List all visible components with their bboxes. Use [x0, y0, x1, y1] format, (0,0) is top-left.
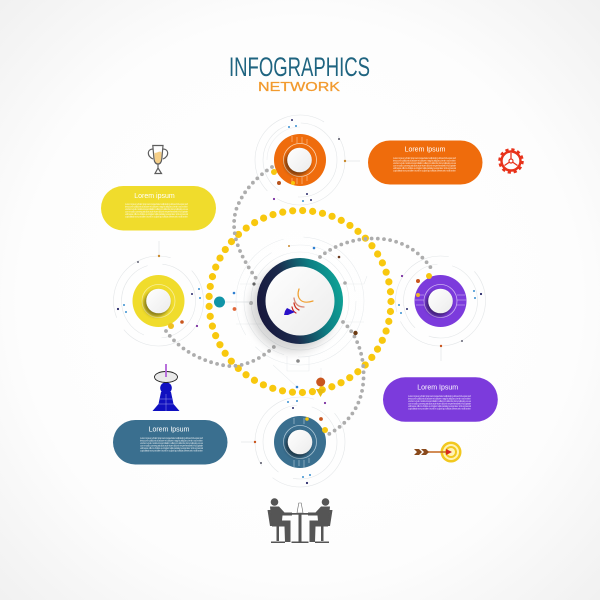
grey dotted path: center to right node — [320, 238, 433, 271]
subtitle: NETWORK — [258, 80, 341, 94]
node: left yellow — [132, 275, 184, 327]
orange connector dot and marker — [316, 378, 325, 397]
panel: yellow pill — [101, 186, 216, 230]
node: bottom blue — [274, 416, 326, 468]
body text — [140, 436, 204, 452]
body text: Lorem ipsum dolor sit amet consectetur adipiscing elit sed do eiusmod — [140, 436, 203, 440]
body text: tempor incididunt ut labore et dolore magna aliqua ut enim ad minim — [408, 396, 472, 400]
body text: veniam quis nostrud exercitation ullamco laboris nisi ut aliquip ex ea — [125, 207, 188, 211]
body text: tempor incididunt ut labore et dolore magna aliqua ut enim ad minim — [140, 438, 204, 442]
node: top orange — [274, 134, 326, 186]
body text: veniam quis nostrud exercitation ullamco laboris nisi ut aliquip ex ea — [393, 161, 456, 165]
body text: cupidatat non proident sunt in culpa qui officia deserunt mollit anim — [125, 214, 189, 218]
body text: velit esse cillum dolore eu fugiat nulla pariatur excepteur sint occaecat — [408, 404, 471, 408]
body text: cupidatat non proident sunt in culpa qui officia deserunt mollit anim — [393, 168, 457, 172]
body text: Lorem ipsum dolor sit amet consectetur adipiscing elit sed do eiusmod — [408, 394, 472, 398]
icon: satellite signal — [284, 289, 313, 315]
icon: trophy glass — [148, 146, 168, 174]
body text: veniam quis nostrud exercitation ullamco laboris nisi ut aliquip ex ea — [140, 441, 204, 445]
center circle — [250, 258, 343, 352]
orbit rings: top node — [255, 115, 360, 205]
table and monitor — [283, 503, 317, 543]
body text: tempor incididunt ut labore et dolore magna aliqua ut enim ad minim — [125, 204, 189, 208]
node: right purple — [414, 275, 466, 327]
right person — [308, 498, 332, 543]
body text: Lorem ipsum dolor sit amet consectetur adipiscing elit sed do eiusmod — [393, 156, 456, 160]
orbit rings: left node — [114, 241, 204, 346]
body text — [125, 202, 189, 218]
grey dotted path: left node to center — [166, 331, 278, 366]
icon: two people at a table — [268, 498, 332, 543]
body text: velit esse cillum dolore eu fugiat nulla pariatur excepteur sint occaecat — [393, 166, 456, 170]
teal connector dot — [214, 296, 250, 311]
body text — [393, 156, 457, 172]
orbit rings: bottom node — [241, 397, 345, 487]
junction dots — [168, 169, 432, 433]
body text — [408, 394, 472, 410]
body text: commodo consequat duis aute irure dolor in reprehenderit in voluptate — [125, 210, 189, 214]
icon: gear — [500, 150, 522, 172]
icon: target with arrow — [414, 442, 462, 462]
body text: cupidatat non proident sunt in culpa qui officia deserunt mollit anim — [408, 406, 472, 410]
body text: cupidatat non proident sunt in culpa qui officia deserunt mollit anim — [140, 448, 204, 452]
heading: Lorem Ipsum — [405, 146, 446, 154]
grey dotted path: top node to center — [234, 167, 272, 281]
body text: Lorem ipsum dolor sit amet consectetur adipiscing elit sed do eiusmod — [125, 202, 188, 206]
left person — [268, 498, 292, 543]
center circuit rings — [233, 237, 367, 390]
heading: Lorem Ipsum — [417, 384, 458, 392]
body text: commodo consequat duis aute irure dolor in reprehenderit in voluptate — [140, 444, 204, 448]
panel: orange pill — [368, 140, 482, 184]
panel: blue pill — [113, 420, 228, 464]
body text: commodo consequat duis aute irure dolor in reprehenderit in voluptate — [408, 402, 472, 406]
title: INFOGRAPHICS — [229, 52, 370, 82]
icon: satellite tower — [152, 364, 180, 411]
body text: velit esse cillum dolore eu fugiat nulla pariatur excepteur sint occaecat — [125, 212, 188, 216]
panel: purple pill — [383, 377, 498, 422]
heading: Lorem ipsum — [134, 193, 175, 200]
body text: velit esse cillum dolore eu fugiat nulla pariatur excepteur sint occaecat — [140, 446, 203, 450]
orbit rings: right node — [396, 256, 486, 361]
grey dotted path: center to bottom node — [329, 322, 364, 434]
body text: commodo consequat duis aute irure dolor in reprehenderit in voluptate — [393, 164, 456, 168]
heading: Lorem Ipsum — [149, 426, 190, 434]
yellow dotted ring — [209, 210, 391, 392]
body text: tempor incididunt ut labore et dolore magna aliqua ut enim ad minim — [393, 158, 457, 162]
body text: veniam quis nostrud exercitation ullamco laboris nisi ut aliquip ex ea — [408, 399, 472, 403]
